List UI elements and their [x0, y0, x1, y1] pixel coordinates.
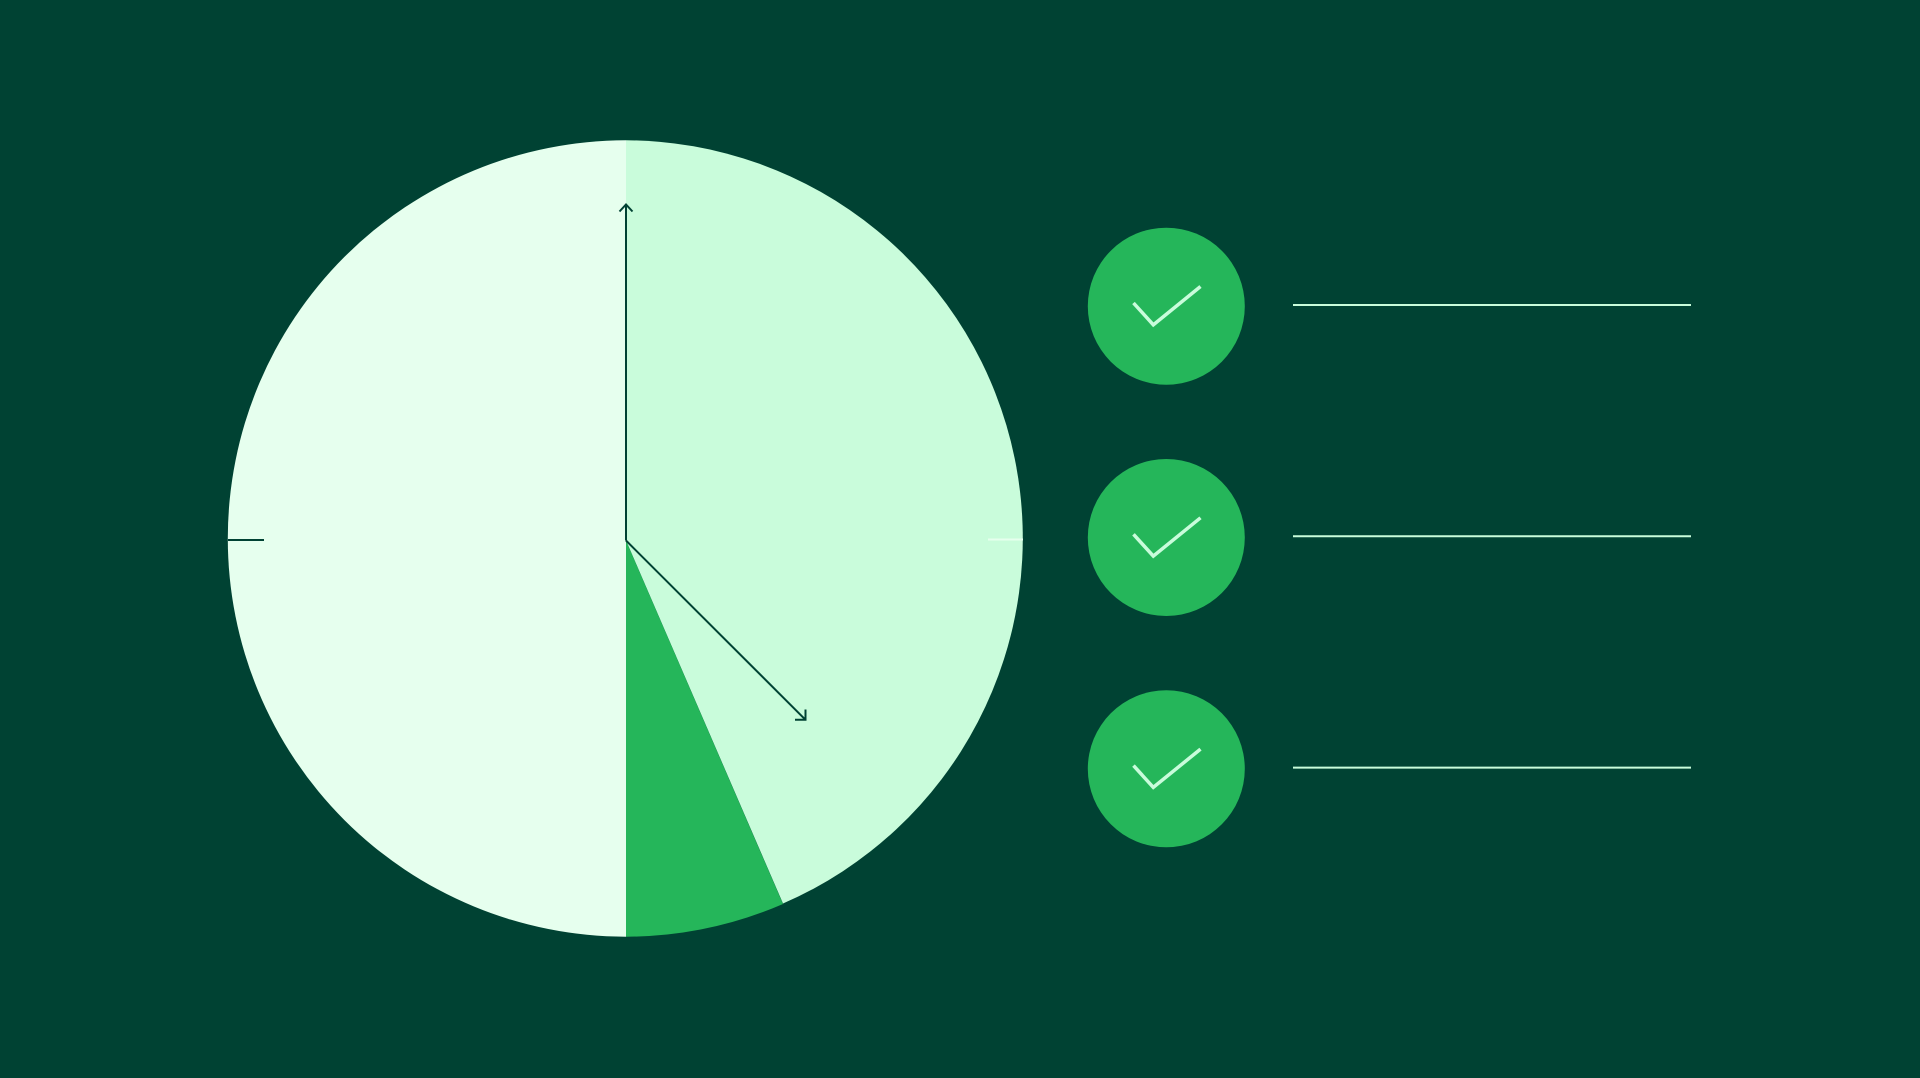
arrow: vertical [620, 204, 632, 540]
tick: left [228, 539, 264, 541]
empty text line [1293, 767, 1691, 769]
pie slice: green segment [626, 540, 783, 937]
list item 1 [1088, 228, 1691, 385]
empty text line [1293, 535, 1691, 537]
arrow: diagonal [626, 540, 806, 720]
tick: right [988, 538, 1023, 540]
list item 2 [1088, 459, 1691, 616]
pie slice: left half [228, 140, 626, 937]
empty text line [1293, 304, 1691, 306]
icon: check badge [1088, 690, 1245, 847]
list item 3 [1088, 690, 1691, 847]
icon: check badge [1088, 459, 1245, 616]
pie slice: right segment [626, 140, 1023, 904]
icon: check badge [1088, 228, 1245, 385]
pie chart [228, 140, 1023, 937]
